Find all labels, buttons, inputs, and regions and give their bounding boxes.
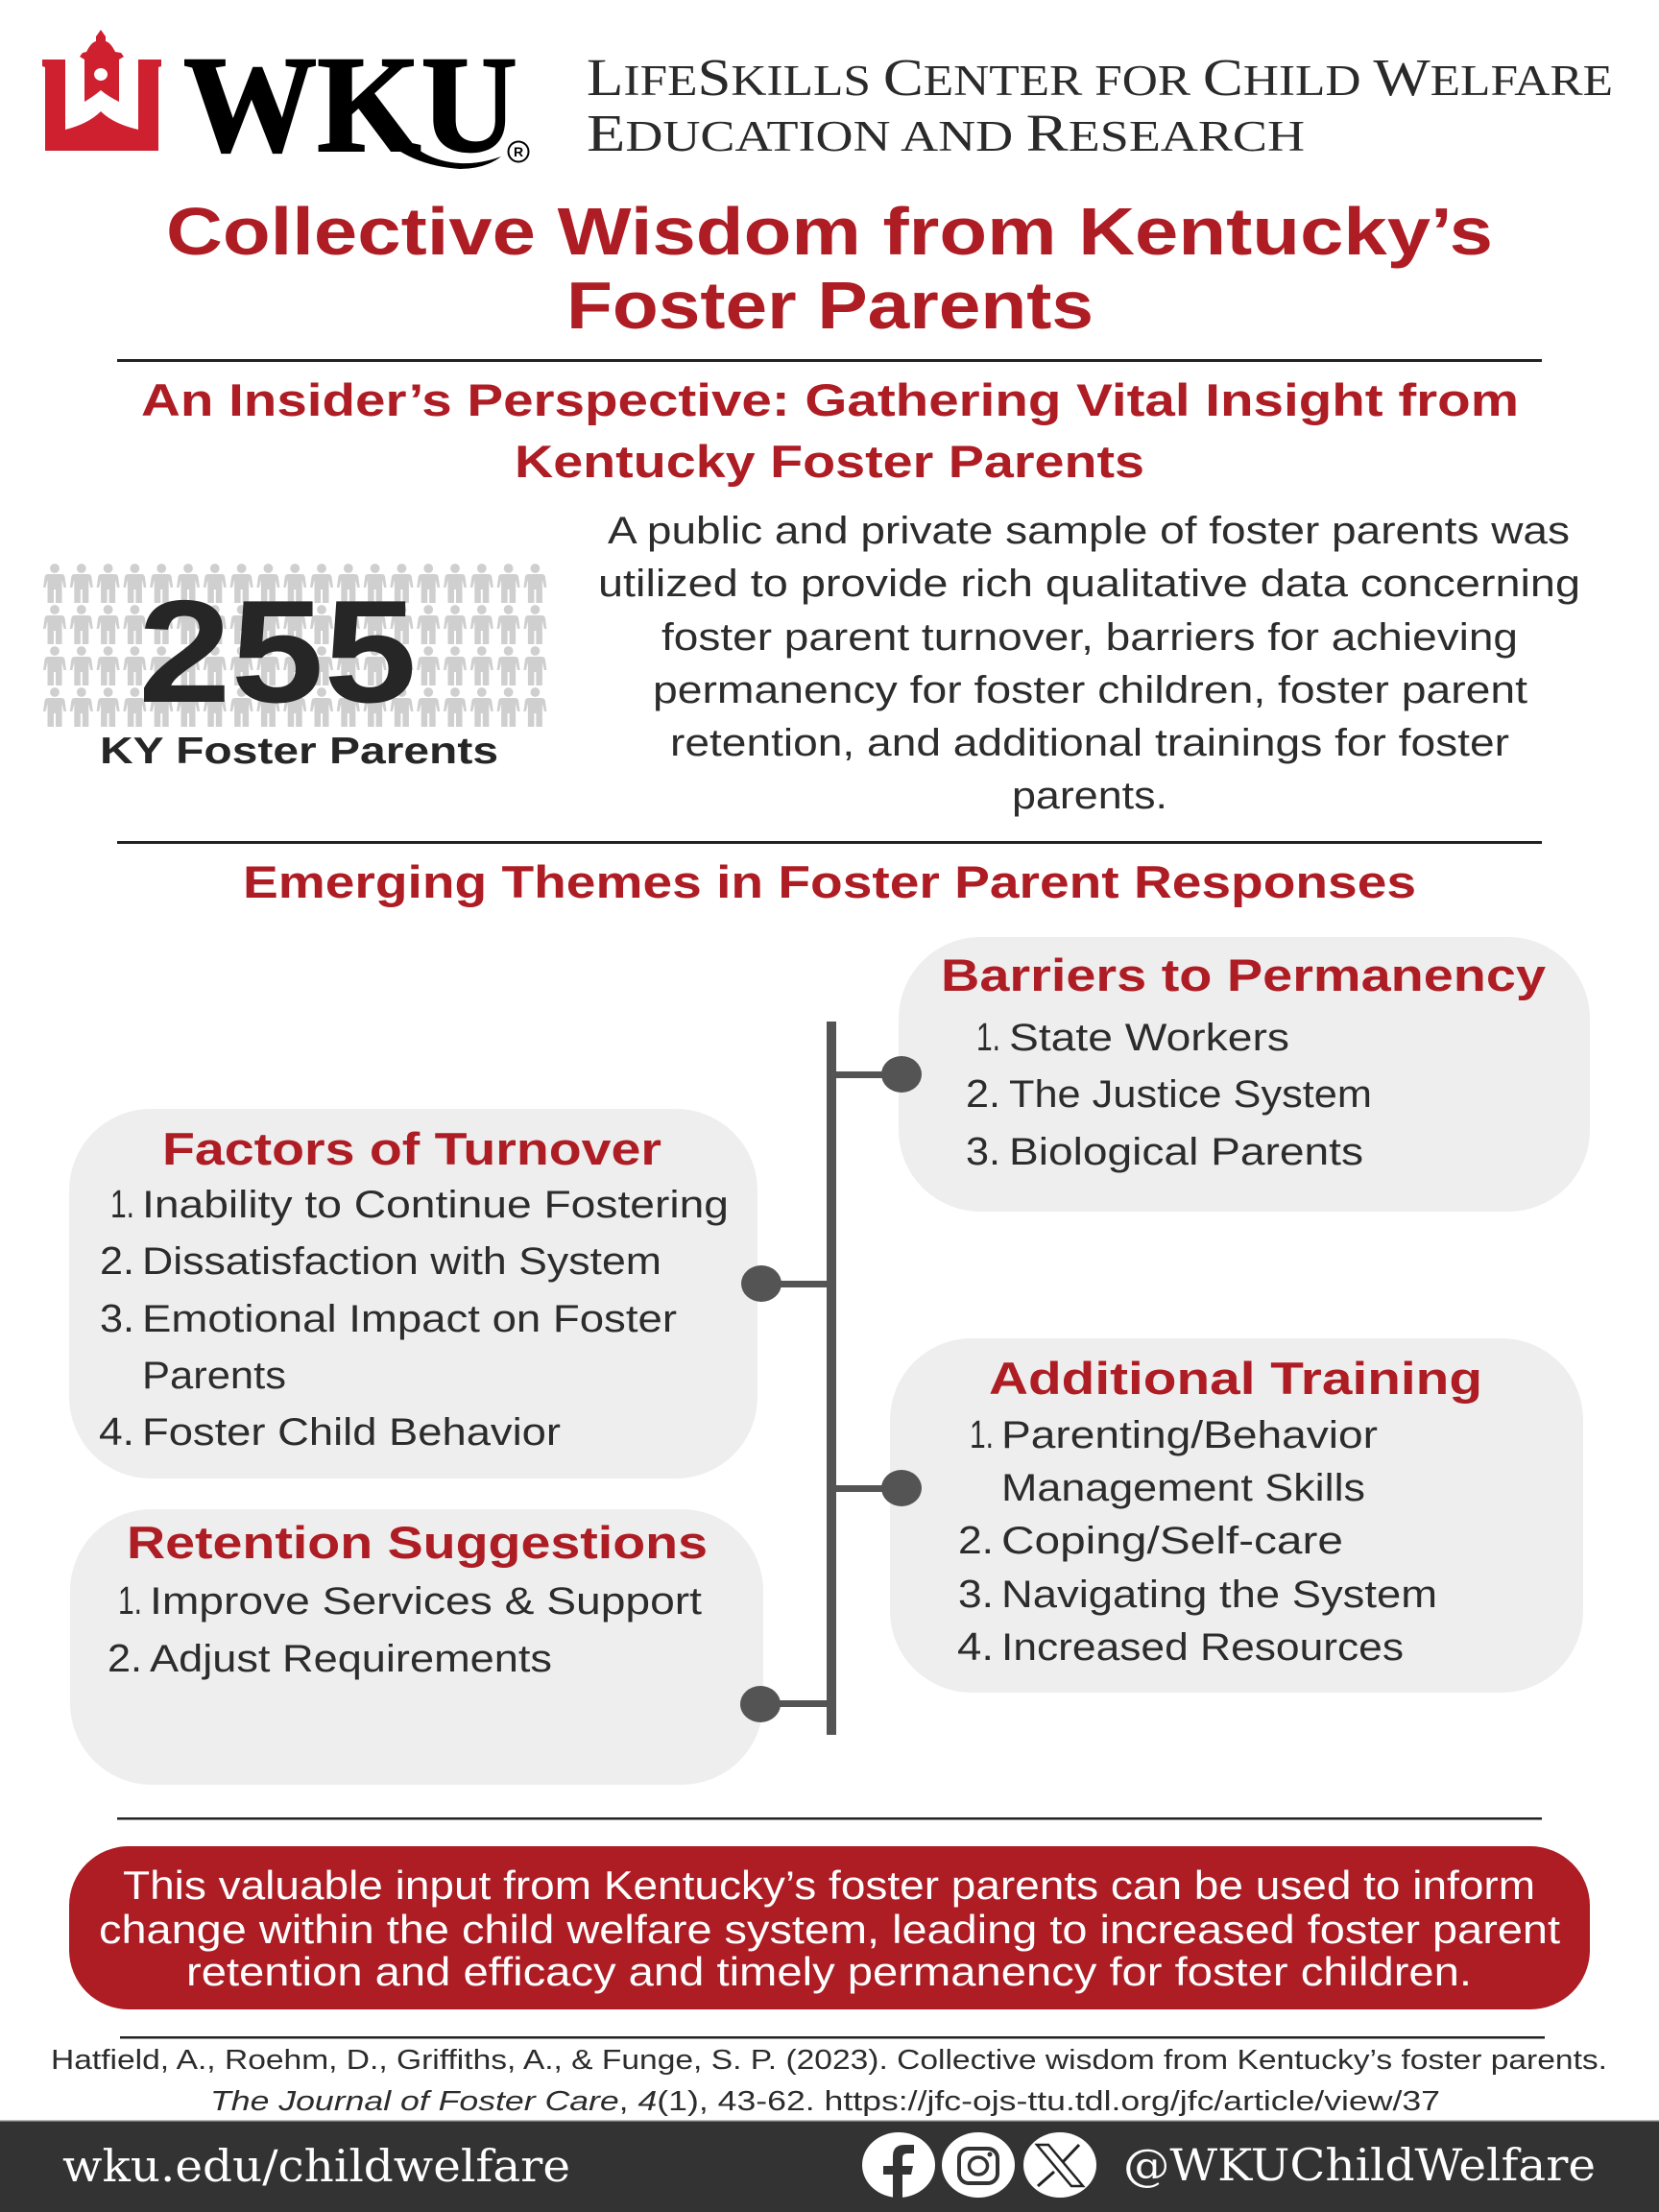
list: 2.: [966, 1071, 1000, 1116]
callout: conclusion banner: change within the child welfare system, leading to increased foster parent: [99, 1907, 1560, 1952]
list: 3.: [100, 1296, 134, 1340]
icon: X: [1023, 2132, 1096, 2198]
stat: 255 KY Foster Parents: [43, 564, 546, 772]
stat number: 255: [138, 570, 417, 733]
icon: facebook: [862, 2132, 935, 2198]
list: Improve Services & Support: [150, 1580, 702, 1623]
list: 4.: [957, 1624, 994, 1669]
list: 1.: [976, 1015, 1000, 1059]
list: 1.: [970, 1412, 994, 1456]
panel: additional training: [890, 1338, 1583, 1693]
list: Management Skills: [1001, 1467, 1365, 1509]
list: Inability to Continue Fostering: [142, 1184, 729, 1226]
title: Collective Wisdom from Kentucky’s: [166, 194, 1493, 269]
list: Navigating the System: [1001, 1574, 1437, 1616]
subtitle: Kentucky Foster Parents: [515, 436, 1144, 487]
list: 4.: [99, 1409, 134, 1454]
list: Biological Parents: [1009, 1131, 1363, 1173]
icon: WKU cupola shield: [42, 30, 161, 151]
citation: The Journal of Foster Care , 4(1), 43-62. https://jfc-ojs-ttu.tdl.org/jfc/article/view/37: [210, 2086, 1440, 2117]
list: 2.: [958, 1518, 994, 1562]
registered mark: [509, 142, 528, 161]
text block: study description: retention, and additional trainings for foster: [670, 722, 1509, 764]
list: Coping/Self-care: [1001, 1520, 1343, 1562]
list: Emotional Impact on Foster: [142, 1298, 677, 1340]
social handle: @WKUChildWelfare: [1123, 2139, 1596, 2191]
list: [957, 1412, 1437, 1669]
panel: retention suggestions: [70, 1509, 763, 1785]
list: 2.: [100, 1238, 134, 1283]
callout: conclusion banner: retention and efficacy and timely permanency for foster children.: [186, 1949, 1472, 1994]
U swash: [379, 130, 501, 169]
panel: factors of turnover: [69, 1109, 757, 1479]
list: 3.: [966, 1129, 1000, 1173]
heading: Additional Training: [989, 1353, 1482, 1404]
registered mark: R: [514, 144, 523, 159]
heading: Barriers to Permanency: [941, 950, 1546, 1000]
text block: study description: parents.: [1012, 775, 1167, 817]
timeline connector: [740, 1022, 922, 1735]
list: Adjust Requirements: [150, 1638, 552, 1680]
title: [166, 194, 1493, 343]
list: 3.: [958, 1572, 994, 1616]
list: Foster Child Behavior: [142, 1411, 561, 1454]
list: [966, 1015, 1372, 1173]
pictogram of people: [43, 564, 546, 727]
citation: [51, 2045, 1607, 2117]
callout: conclusion banner: This valuable input from Kentucky’s foster parents can be used to inform: [123, 1863, 1535, 1908]
text block: study description: permanency for foster children, foster parent: [653, 669, 1527, 711]
list: Increased Resources: [1001, 1626, 1404, 1669]
text block: study description: A public and private sample of foster parents was: [608, 510, 1570, 552]
list: State Workers: [1009, 1017, 1289, 1059]
list: 2.: [108, 1636, 142, 1680]
organisation name: [587, 48, 1613, 162]
panel: barriers to permanency: [899, 937, 1590, 1212]
wordmark: WKU: [183, 29, 517, 181]
text block: study description: foster parent turnover, barriers for achieving: [661, 616, 1518, 659]
text block: study description: utilized to provide rich qualitative data concerning: [598, 563, 1580, 605]
list: The Justice System: [1009, 1073, 1372, 1116]
subtitle: An Insider’s Perspective: Gathering Vital Insight from: [141, 374, 1519, 425]
list: Parents: [142, 1355, 286, 1397]
list: 1.: [118, 1578, 142, 1623]
stat label: KY Foster Parents: [100, 731, 498, 772]
footer bar: [0, 2120, 1659, 2212]
citation: Hatfield, A., Roehm, D., Griffiths, A., & Funge, S. P. (2023). Collective wisdom from Kentucky’s foster parents.: [51, 2045, 1607, 2076]
list: Parenting/Behavior: [1001, 1414, 1378, 1456]
list: [99, 1182, 729, 1454]
list: 1.: [110, 1182, 134, 1226]
text block: study description: [598, 510, 1580, 817]
logo: WKU: [42, 29, 528, 181]
organisation name: LIFESKILLS CENTER FOR CHILD WELFARE: [587, 48, 1613, 107]
title: Foster Parents: [566, 268, 1094, 343]
icon: instagram: [942, 2132, 1015, 2198]
callout: conclusion banner: [69, 1846, 1590, 2009]
heading: Factors of Turnover: [162, 1123, 661, 1174]
list: Dissatisfaction with System: [142, 1240, 661, 1283]
heading: Retention Suggestions: [127, 1517, 708, 1568]
list: [108, 1578, 702, 1680]
organisation name: EDUCATION AND RESEARCH: [587, 104, 1305, 162]
website: wku.edu/childwelfare: [62, 2140, 570, 2192]
section heading: Emerging Themes in Foster Parent Responses: [243, 856, 1416, 907]
subtitle: [141, 374, 1519, 487]
